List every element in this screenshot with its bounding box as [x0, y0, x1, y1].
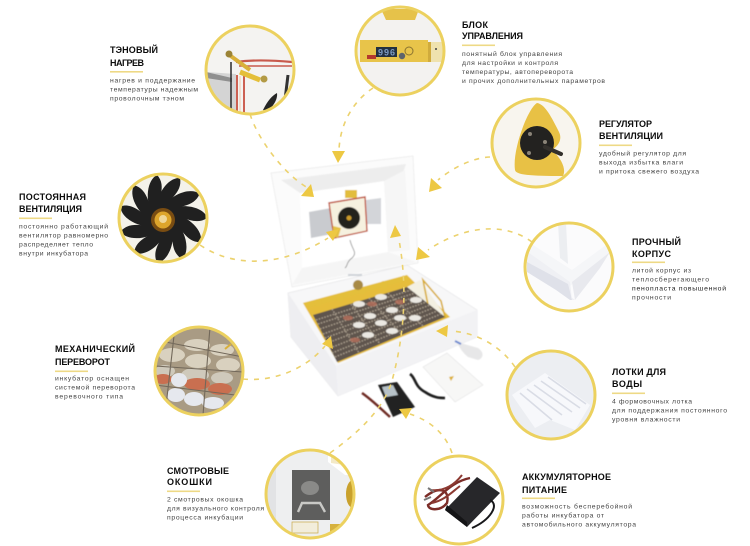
description: [55, 374, 135, 400]
callout: durable housing: [525, 223, 726, 311]
description: [167, 496, 264, 522]
accessories: power supply, cable, manual, bottle: [362, 341, 483, 417]
heading: ПРОЧНЫЙ: [632, 236, 681, 247]
description: [19, 222, 108, 258]
egg tray: [303, 274, 450, 363]
description: 2 смотровых окошка: [167, 496, 243, 504]
heading: [55, 343, 135, 367]
heading: ПЕРЕВОРОТ: [55, 357, 110, 367]
heading: СМОТРОВЫЕ: [167, 466, 229, 476]
heading: [612, 367, 666, 389]
callout: ventilation regulator: [492, 99, 699, 187]
heading: [462, 20, 523, 41]
description: для поддержания постоянного: [612, 408, 727, 414]
heading: АККУМУЛЯТОРНОЕ: [522, 472, 611, 482]
description: [632, 266, 726, 302]
arrow: heating to incubator: [250, 114, 314, 197]
description: работы инкубатора от: [522, 512, 604, 520]
incubator base: [288, 265, 477, 396]
arrow: turning mechanism to incubator: [243, 336, 333, 379]
description: вентилятор равномерно: [19, 232, 108, 240]
description: для визуального контроля: [167, 506, 264, 512]
description: температуры надежным: [110, 86, 198, 94]
callout: control unit: [356, 7, 605, 95]
heading: МЕХАНИЧЕСКИЙ: [55, 343, 135, 354]
description: и прочих дополнительных параметров: [462, 78, 605, 85]
description: [599, 150, 699, 176]
description: пенопласта повышенной: [632, 284, 726, 292]
arrow: batteries to incubator: [399, 408, 452, 453]
incubator lid: [271, 156, 418, 287]
heading: [522, 472, 611, 495]
heading: [110, 44, 158, 68]
description: процесса инкубации: [167, 514, 243, 522]
description: проволочным тэном: [110, 96, 184, 102]
icon: eggs photo: [154, 327, 243, 415]
heading: [599, 119, 663, 141]
callout: battery power: [415, 456, 636, 544]
description: [462, 50, 605, 85]
heading: БЛОК: [462, 20, 488, 30]
heading: НАГРЕВ: [110, 58, 144, 68]
description: температуры, автопереворота: [462, 69, 573, 76]
description: 4 формовочных лотка: [612, 398, 692, 406]
description: теплосберегающего: [632, 276, 709, 284]
heading: УПРАВЛЕНИЯ: [462, 31, 523, 41]
description: и притока свежего воздуха: [599, 168, 699, 176]
description: возможность бесперебойной: [522, 502, 632, 510]
heading: ЛОТКИ ДЛЯ: [612, 367, 666, 377]
heading: [632, 236, 681, 259]
description: выхода избытка влаги: [599, 158, 683, 166]
heading: ПИТАНИЕ: [522, 485, 567, 495]
icon: regulator photo: [492, 99, 580, 187]
description: понятный блок управления: [462, 50, 562, 58]
description: распределяет тепло: [19, 242, 93, 248]
heading: ВЕНТИЛЯЦИЯ: [19, 204, 82, 214]
callout: mechanical turning: [55, 327, 243, 415]
description: постоянно работающий: [19, 222, 108, 230]
icon: control panel photo: 996: [378, 48, 395, 58]
icon: window photo: [266, 450, 360, 538]
arrow: windows to incubator: [330, 225, 404, 453]
icon: power adapter photo: [415, 456, 503, 544]
heading: РЕГУЛЯТОР: [599, 119, 652, 129]
description: удобный регулятор для: [599, 150, 686, 158]
heading: [19, 192, 86, 214]
icon: foam corner photo: [525, 223, 613, 311]
icon: control panel photo: [356, 7, 444, 95]
heading: ПОСТОЯННАЯ: [19, 192, 86, 202]
description: литой корпус из: [632, 266, 691, 274]
icon: water tray photo: [507, 351, 595, 439]
description: прочности: [632, 294, 671, 302]
arrow: housing to incubator: [416, 229, 532, 260]
fan and heater unit on lid: [329, 190, 367, 268]
callout: viewing windows: [167, 450, 360, 538]
icon: fan photo: [119, 174, 208, 263]
heading: [167, 466, 229, 487]
description: для настройки и контроля: [462, 59, 558, 67]
description: нагрев и поддержание: [110, 78, 195, 84]
arrow: fan to incubator: [200, 229, 339, 261]
heading: КОРПУС: [632, 249, 672, 259]
description: [612, 398, 727, 424]
arrow: ventilation regulator to incubator: [429, 157, 490, 192]
description: уровня влажности: [612, 416, 680, 424]
heading: ТЭНОВЫЙ: [110, 44, 158, 55]
callout: water trays: [507, 351, 727, 439]
description: инкубатор оснащен: [55, 374, 129, 382]
arrow: water trays to incubator: [436, 325, 515, 367]
description: веревочного типа: [55, 394, 123, 400]
callout: constant ventilation: [19, 174, 208, 263]
callout: heating: [110, 26, 294, 114]
icon: heater photo: [206, 26, 294, 114]
description: внутри инкубатора: [19, 250, 88, 258]
description: автомобильного аккумулятора: [522, 520, 636, 528]
heading: ВОДЫ: [612, 379, 642, 389]
description: системой переворота: [55, 384, 135, 392]
description: [522, 502, 636, 528]
incubator illustration: [271, 156, 483, 417]
heading: ВЕНТИЛЯЦИИ: [599, 131, 663, 141]
description: [110, 78, 198, 102]
arrow: control unit to incubator: [332, 88, 373, 163]
heading: ОКОШКИ: [167, 477, 212, 487]
